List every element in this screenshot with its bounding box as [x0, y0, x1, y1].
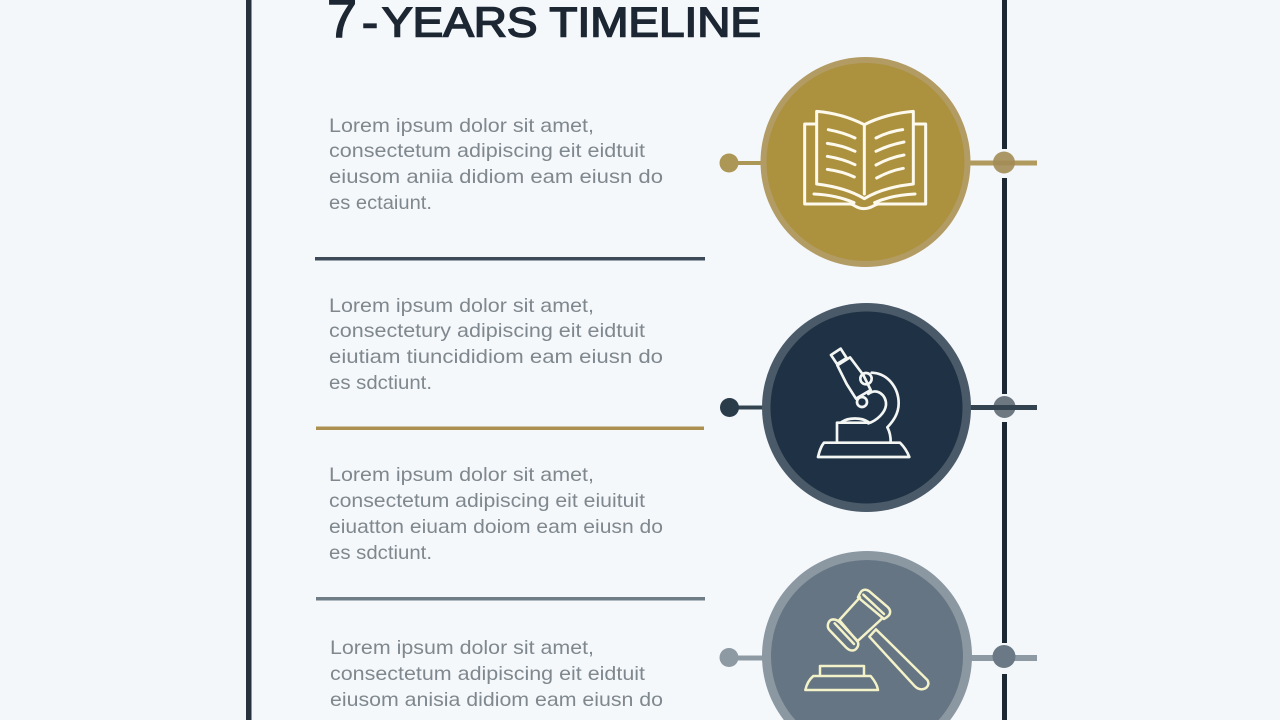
- icon: microscope: [818, 349, 909, 457]
- text block 1: Lorem ipsum dolor sit amet,: [329, 115, 594, 137]
- text block 4: eiusom anisia didiom eam eiusn do: [330, 689, 663, 711]
- text block 2: consectetury adipiscing eit eidtuit: [329, 320, 646, 342]
- text block 3: es sdctiunt.: [329, 542, 432, 564]
- timeline node 3: gavel: [720, 551, 1037, 720]
- title: -: [362, 0, 378, 47]
- text block 1: eiusom aniia didiom eam eiusn do: [329, 166, 663, 188]
- right timeline rail: [1002, 0, 1007, 720]
- divider 1: [315, 257, 705, 260]
- text block 3: Lorem ipsum dolor sit amet,: [329, 464, 594, 486]
- text block 3: [329, 464, 663, 564]
- text block 2: [329, 295, 663, 394]
- text block 2: Lorem ipsum dolor sit amet,: [329, 295, 594, 317]
- text block 2: eiutiam tiuncididiom eam eiusn do: [329, 346, 663, 368]
- text block 4: [330, 637, 663, 711]
- text block 3: consectetum adipiscing eit eiuituit: [329, 490, 646, 512]
- text block 1: [329, 115, 663, 214]
- icon: gavel: [805, 590, 928, 690]
- timeline node 2: microscope: [720, 303, 1037, 512]
- icon: open book: [805, 111, 926, 209]
- text block 2: es sdctiunt.: [329, 372, 432, 394]
- text block 4: Lorem ipsum dolor sit amet,: [330, 637, 594, 659]
- text block 3: eiuatton eiuam doiom eam eiusn do: [329, 516, 663, 538]
- divider 2: [316, 426, 704, 430]
- text block 1: consectetum adipiscing eit eidtuit: [329, 140, 646, 162]
- divider 3: [316, 597, 705, 600]
- text block 4: consectetum adipiscing eit eidtuit: [330, 663, 646, 685]
- timeline node 1: book: [720, 57, 1037, 267]
- text block 1: es ectaiunt.: [329, 192, 432, 214]
